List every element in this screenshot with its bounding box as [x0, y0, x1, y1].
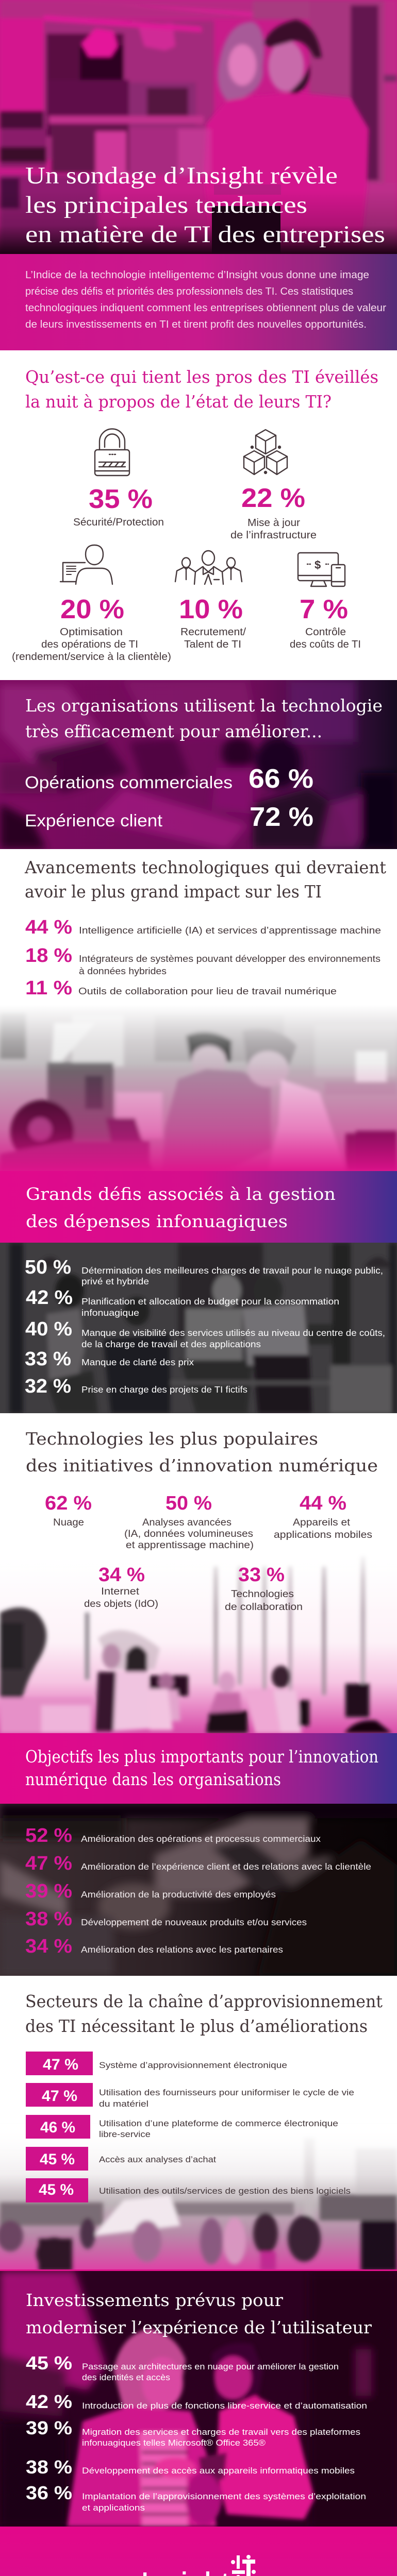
photo: blurred city crowd fading to magenta [0, 2123, 397, 2271]
stat: 45: des identités et accès [82, 2373, 170, 2382]
stat: 39 [25, 1880, 276, 1902]
stat: collaboration: Technologies [231, 1589, 294, 1600]
heading [26, 2290, 372, 2337]
stat: costs: des coûts de TI [290, 639, 361, 650]
stat: infrastructure: de l’infrastructure [230, 530, 317, 541]
stat: 38: Développement des accès aux appareils informatiques mobiles [82, 2466, 355, 2476]
stat: 45: 45 % [26, 2352, 72, 2374]
stat: cloud: Nuage [53, 1517, 84, 1528]
panel: digital innovation technologies [0, 1429, 397, 1733]
stat: mobile: applications mobiles [274, 1530, 372, 1540]
icon: cubes [244, 430, 287, 474]
stat: IT operations: 20 % [60, 595, 124, 624]
stat: 52 [25, 1825, 321, 1846]
stat: 47 [25, 1853, 371, 1874]
stat: customer experience: 72 % [250, 802, 313, 832]
stat: AI [25, 917, 381, 938]
stat: costs: Contrôle [305, 626, 346, 638]
stat: 39: infonuagiques telles Microsoft® Office 365® [82, 2438, 266, 2448]
photo: two women with phone, magenta on dark [0, 2271, 397, 2527]
row: analytics: 45 % [40, 2151, 75, 2168]
heading [25, 1991, 383, 2036]
stat: customer experience: Expérience client [25, 811, 162, 830]
stat: 40: 40 % [25, 1318, 72, 1340]
row: software assets [26, 2178, 351, 2202]
heading: Les organisations utilisent la technologie [25, 696, 383, 716]
stat: 42 [26, 1287, 339, 1318]
stat: advanced analytics: (IA, données volumineuses [124, 1529, 253, 1539]
row: analytics: Accès aux analyses d’achat [99, 2155, 216, 2164]
heading [25, 696, 383, 741]
stat: talent: Talent de TI [184, 639, 241, 650]
stat: collaboration tools: Outils de collaboration pour lieu de travail numérique [78, 986, 337, 996]
stat: security [73, 484, 164, 528]
stat: 40 [25, 1318, 385, 1349]
stat: 39 [26, 2417, 360, 2448]
stat: IoT: 34 % [98, 1564, 145, 1586]
icon: team [175, 551, 242, 584]
intro text: technologiques indiquent comment les entreprises obtiennent plus de valeur [25, 302, 386, 314]
stat: mobile: 44 % [300, 1493, 346, 1514]
heading [26, 1429, 378, 1476]
stat: business operations: 66 % [249, 764, 313, 794]
panel: cloud spend challenges [0, 1171, 397, 1413]
title: en matière de TI des entreprises [25, 221, 385, 248]
icon: devices with dollar: $ [315, 558, 321, 571]
stat: 40: Manque de visibilité des services utilisés au niveau du centre de coûts, [81, 1328, 385, 1338]
stat: cloud [45, 1493, 92, 1528]
heading band [0, 1171, 397, 1243]
heading [24, 857, 386, 902]
heading: des TI nécessitant le plus d’améliorations [25, 2016, 368, 2036]
row: e-procurement [26, 2052, 287, 2075]
stat: 39: Migration des services et charges de travail vers des plateformes [82, 2428, 360, 2437]
photo: people in an office, dark grey [0, 1243, 397, 1413]
row: software assets: 45 % [39, 2181, 74, 2198]
title: Un sondage d’Insight révèle [25, 162, 338, 189]
stat: 39: 39 % [26, 2417, 72, 2438]
stat: 50: Détermination des meilleures charges de travail pour le nuage public, [81, 1265, 383, 1276]
hero photo: couple in office, magenta duotone [0, 0, 397, 254]
intro text: de leurs investissements en TI et tirent profit des nouvelles opportunités. [25, 319, 367, 330]
stat: business operations [25, 764, 313, 794]
icon: padlock [95, 429, 129, 476]
stat: infrastructure: 22 % [241, 483, 305, 513]
stat: cloud: 62 % [45, 1493, 92, 1514]
stat: 38: Développement de nouveaux produits et/ou services [81, 1917, 307, 1927]
stat: collaboration tools: 11 % [25, 977, 72, 999]
stat: 33: 33 % [25, 1348, 71, 1370]
stat: collaboration tools [25, 977, 337, 999]
stat: advanced analytics: Analyses avancées [142, 1517, 231, 1528]
row: software assets: Utilisation des outils/services de gestion des biens logiciels [99, 2186, 351, 2196]
stat: advanced analytics: et apprentissage machine) [126, 1540, 254, 1551]
heading: Qu’est-ce qui tient les pros des TI éveillés [25, 367, 378, 387]
stat: infrastructure: Mise à jour [247, 517, 300, 529]
row: vendors: Utilisation des fournisseurs pour uniformiser le cycle de vie [99, 2088, 354, 2097]
intro band background [0, 254, 397, 350]
panel: what keeps IT pros awake [12, 367, 378, 663]
row: e-procurement: 47 % [43, 2056, 78, 2073]
stat: 36: Implantation de l’approvisionnement des systèmes d’exploitation [82, 2492, 366, 2501]
stat: IT operations: (rendement/service à la clientèle) [12, 651, 171, 663]
stat: 50: 50 % [25, 1257, 71, 1278]
stat: 45 [26, 2352, 339, 2382]
heading: des initiatives d’innovation numérique [26, 1455, 378, 1476]
row: e-commerce: libre-service [99, 2129, 151, 2139]
stat: 45: Passage aux architectures en nuage pour améliorer la gestion [82, 2362, 339, 2371]
stat: 36: 36 % [26, 2482, 72, 2503]
stat: 32 [25, 1376, 247, 1397]
stat: 36: et applications [82, 2503, 145, 2513]
panel: footer [0, 2527, 397, 2576]
stat: security: Sécurité/Protection [73, 517, 164, 528]
heading: Investissements prévus pour [26, 2290, 283, 2310]
stat: AI: Intelligence artificielle (IA) et services d’apprentissage machine [79, 925, 381, 936]
stat: talent: 10 % [179, 595, 243, 624]
heading: la nuit à propos de l’état de leurs TI? [25, 392, 332, 412]
stat: collaboration: de collaboration [225, 1602, 303, 1613]
panel: planned investments [0, 2271, 397, 2527]
stat: infrastructure [230, 483, 317, 541]
title: les principales tendances [25, 192, 307, 218]
stat: IoT: des objets (IdO) [84, 1599, 158, 1609]
stat: AI: 44 % [25, 917, 72, 938]
heading: Avancements technologiques qui devraient [24, 857, 386, 877]
stat: 36 [26, 2482, 366, 2513]
stat: talent [179, 595, 246, 650]
title [25, 162, 385, 248]
heading band [0, 1733, 397, 1804]
stat: collaboration: 33 % [238, 1564, 285, 1586]
stat: 33: Manque de clarté des prix [81, 1357, 194, 1367]
icon: devices with dollar [298, 553, 345, 586]
stat: talent: Recrutement/ [180, 626, 246, 638]
row: e-commerce: Utilisation d’une plateforme de commerce électronique [99, 2119, 338, 2128]
stat: 39: 39 % [25, 1880, 72, 1902]
stat: 33 [25, 1348, 194, 1370]
stat: business operations: Opérations commerciales [25, 773, 233, 792]
stat: 47: 47 % [25, 1853, 72, 1874]
stat: IoT [84, 1564, 158, 1609]
row: vendors: 47 % [42, 2088, 77, 2105]
stat: 42: Planification et allocation de budget pour la consommation [81, 1296, 339, 1307]
stat: IT operations [12, 595, 171, 663]
intro text: L’Indice de la technologie intelligentemc d’Insight vous donne une image [25, 269, 369, 281]
heading: très efficacement pour améliorer... [25, 721, 322, 741]
stat: advanced analytics: 50 % [166, 1493, 212, 1514]
stat: costs [290, 595, 361, 650]
photo: engineers in a lab, fading to magenta [0, 1005, 397, 1171]
stat: 42: 42 % [26, 2391, 72, 2412]
stat: 47: Amélioration de l’expérience client et des relations avec la clientèle [81, 1861, 371, 1872]
row: vendors [26, 2083, 354, 2109]
heading band: Grands défis associés à la gestion [26, 1184, 336, 1204]
row: e-procurement: Système d’approvisionnement électronique [99, 2060, 287, 2070]
row: e-commerce: 46 % [40, 2119, 75, 2136]
row: vendors: du matériel [99, 2099, 148, 2109]
stat: 32: 32 % [25, 1376, 71, 1397]
stat: 42 [26, 2391, 367, 2412]
stat: 34: 34 % [25, 1936, 72, 1957]
stat: 50: privé et hybride [81, 1276, 149, 1286]
stat: integrators [25, 945, 381, 976]
stat: 42: infonuagique [81, 1308, 139, 1318]
heading band: des dépenses infonuagiques [26, 1211, 288, 1231]
stat: mobile: Appareils et [293, 1517, 351, 1528]
panel: hero [0, 0, 397, 254]
stat: 34: Amélioration des relations avec les partenaires [81, 1944, 283, 1955]
row: e-commerce [26, 2115, 338, 2139]
panel: technology advancements [0, 857, 397, 1171]
stat: 38: 38 % [25, 1908, 72, 1930]
logo: Insight [141, 2555, 256, 2576]
photo: open office fading from white to magenta [0, 1551, 397, 1733]
stat: 52: 52 % [25, 1825, 72, 1846]
stat: customer experience [25, 802, 313, 832]
row: analytics [26, 2147, 216, 2171]
stat: 40: de la charge de travail et des applications [81, 1339, 261, 1349]
stat: costs: 7 % [300, 595, 348, 624]
photo: worker with tablet, dark [0, 1804, 397, 1976]
heading: Secteurs de la chaîne d’approvisionnement [25, 1991, 383, 2011]
stat: 38 [26, 2456, 355, 2478]
stat: advanced analytics [124, 1493, 254, 1551]
stat: 39: Amélioration de la productivité des employés [81, 1889, 276, 1900]
heading: avoir le plus grand impact sur les TI [25, 882, 322, 902]
photo: team around a table, purple duotone [0, 680, 397, 849]
stat: IT operations: des opérations de TI [41, 639, 138, 650]
stat: 32: Prise en charge des projets de TI fictifs [81, 1384, 247, 1395]
stat: mobile [274, 1493, 372, 1540]
heading band: numérique dans les organisations [25, 1769, 281, 1789]
panel: supply chain [0, 1991, 397, 2271]
stat: 34 [25, 1936, 283, 1957]
stat: collaboration [225, 1564, 303, 1613]
stat: IT operations: Optimisation [60, 626, 123, 638]
panel: digital innovation goals [0, 1733, 397, 1976]
stat: IoT: Internet [101, 1586, 140, 1597]
footer background [0, 2527, 397, 2576]
stat: 52: Amélioration des opérations et processus commerciaux [81, 1834, 321, 1844]
panel: intro band [0, 254, 397, 350]
stat: security: 35 % [89, 484, 153, 514]
heading: Technologies les plus populaires [26, 1429, 318, 1449]
panel: organisations use technology [0, 680, 397, 849]
icon: person at computer [60, 545, 112, 584]
stat: 50 [25, 1257, 383, 1286]
intro text: précise des défis et priorités des professionnels des TI. Ces statistiques [25, 286, 353, 297]
stat: 42: 42 % [26, 1287, 73, 1309]
stat: integrators: à données hybrides [79, 966, 167, 976]
stat: integrators: Intégrateurs de systèmes pouvant développer des environnements [79, 954, 381, 964]
stat list [25, 1257, 385, 1397]
heading [25, 367, 378, 412]
stat: 38 [25, 1908, 307, 1930]
intro text [25, 269, 386, 330]
heading: moderniser l’expérience de l’utilisateur [26, 2317, 372, 2337]
stat: 42: Introduction de plus de fonctions libre-service et d’automatisation [82, 2401, 367, 2411]
stat: integrators: 18 % [25, 945, 72, 967]
stat: 38: 38 % [26, 2456, 72, 2478]
